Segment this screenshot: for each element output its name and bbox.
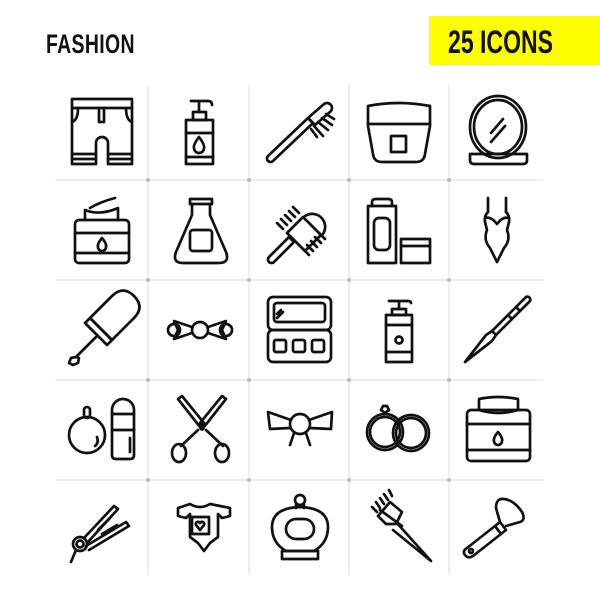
icon: eyeshadow palette [268, 297, 331, 362]
icon: baby bodysuit [178, 504, 230, 551]
icon: scissors [172, 396, 229, 462]
icon: tint brush [372, 490, 431, 561]
icon: hair brush [267, 103, 334, 162]
icon: swimsuit [485, 198, 509, 262]
badge: 25 icons [429, 16, 600, 65]
icon: makeup brush [464, 499, 524, 557]
icon: wedding rings [367, 406, 429, 451]
title: FASHION [46, 29, 135, 59]
icon: jar [467, 397, 530, 461]
icon: round brush [268, 207, 325, 263]
icon: nail polish [69, 290, 140, 365]
icon: shampoo and jar [368, 199, 430, 263]
icon: mirror [470, 96, 527, 164]
icon: cream jar open [75, 198, 129, 263]
icon: round perfume [272, 495, 328, 559]
icon: bow [168, 321, 232, 339]
icon: lotion bottle [386, 301, 412, 362]
icon: hair straightener [71, 506, 129, 562]
icon: flask bottle [175, 199, 227, 263]
icon: pump bottle [186, 101, 213, 164]
icon: ribbon bow [268, 412, 332, 445]
badge: 25 icons: 25 ICONS [448, 24, 553, 60]
icon: cream jar [368, 103, 430, 162]
icon: paint brush [465, 297, 530, 362]
icon: perfume and deodorant [69, 399, 134, 459]
icon: shorts [72, 99, 132, 164]
